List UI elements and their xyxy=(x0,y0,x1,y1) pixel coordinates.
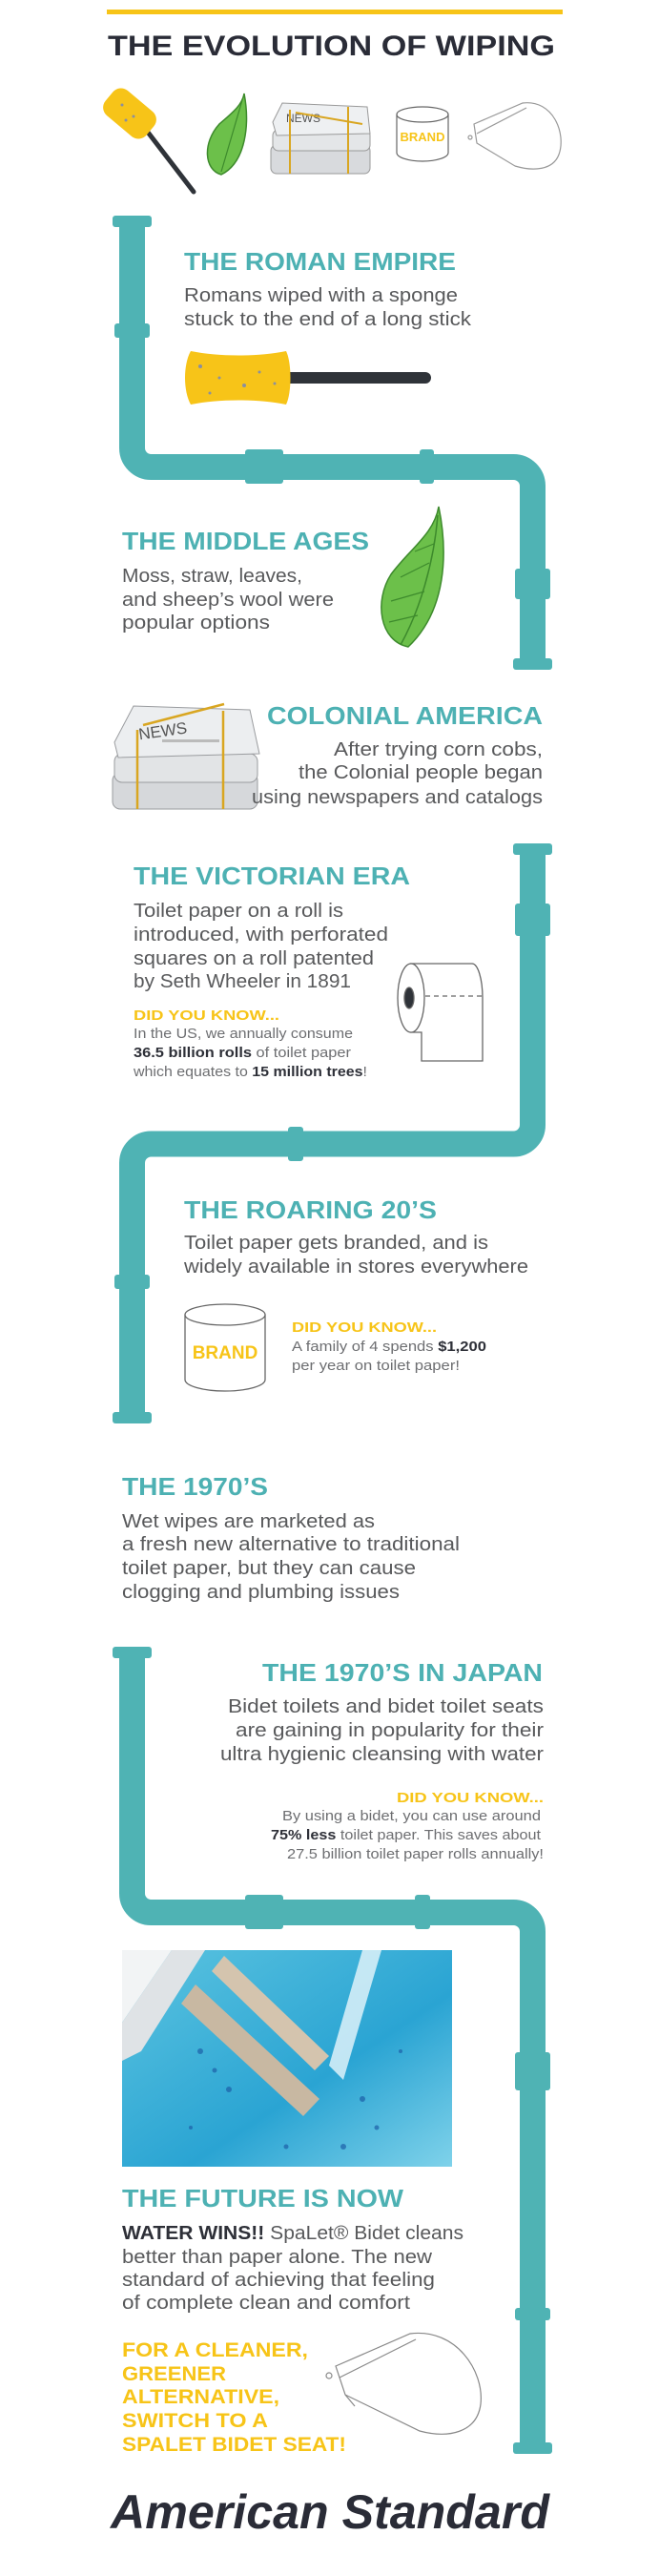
text: middle ages body: and sheep’s wool were xyxy=(122,590,334,611)
callout: victorian did you know xyxy=(133,1008,367,1080)
text: colonial body: the Colonial people began xyxy=(299,762,543,783)
text: middle ages body: popular options xyxy=(122,613,270,634)
top yellow rule xyxy=(107,10,563,14)
callout: japan did you know: 27.5 billion toilet paper rolls annually! xyxy=(287,1847,544,1862)
text: 1970s body: toilet paper, but they can cause xyxy=(122,1558,416,1579)
heading: colonial america: COLONIAL AMERICA xyxy=(267,701,543,730)
icon: sponge on stick xyxy=(99,84,194,192)
callout: victorian did you know: which equates to 15 million trees ! xyxy=(134,1065,367,1080)
callout: switch to spalet: FOR A CLEANER, xyxy=(122,2339,308,2361)
callout: roaring did you know: A family of 4 spends $1,200 xyxy=(292,1340,481,1355)
text: japan body: Bidet toilets and bidet toilet seats xyxy=(228,1696,544,1717)
callout: roaring did you know: per year on toilet paper! xyxy=(292,1359,460,1374)
icon: leaf xyxy=(381,507,443,647)
text: 1970s body: clogging and plumbing issues xyxy=(122,1582,400,1603)
pipe 1 xyxy=(113,216,552,670)
section: the future is now xyxy=(122,2184,481,2456)
callout: japan did you know: DID YOU KNOW... xyxy=(397,1790,544,1806)
text: future body: better than paper alone. The new xyxy=(122,2247,433,2268)
text: victorian body: introduced, with perforated xyxy=(134,924,388,945)
text: japan body: ultra hygienic cleansing with water xyxy=(220,1744,544,1765)
callout: roaring did you know xyxy=(292,1319,486,1374)
icon: bidet seat xyxy=(326,2333,481,2434)
text: japan body: are gaining in popularity for their xyxy=(236,1720,544,1741)
icon: brand roll xyxy=(185,1304,265,1391)
callout: victorian did you know: DID YOU KNOW... xyxy=(134,1008,279,1024)
section: 1970s in japan xyxy=(220,1658,544,1862)
text: future body: standard of achieving that feeling xyxy=(122,2270,435,2291)
icon: toilet roll xyxy=(398,964,483,1061)
heading: 1970s: THE 1970’S xyxy=(122,1472,268,1501)
text: victorian body: Toilet paper on a roll is xyxy=(134,901,343,922)
text: 1970s body: a fresh new alternative to traditional xyxy=(122,1534,460,1555)
logo: american standard: American Standard xyxy=(109,2485,550,2539)
text: 1970s body: Wet wipes are marketed as xyxy=(122,1511,375,1532)
callout: switch to spalet: ALTERNATIVE, xyxy=(122,2386,279,2408)
icon: branded roll xyxy=(397,107,448,161)
text: roman body: Romans wiped with a sponge xyxy=(184,285,458,306)
icon: brand roll: BRAND xyxy=(193,1343,257,1363)
heading: japan: THE 1970’S IN JAPAN xyxy=(262,1658,543,1687)
callout: japan did you know: By using a bidet, you can use around xyxy=(282,1809,541,1824)
photo: bidet wand spraying water xyxy=(122,1950,452,2167)
title: THE EVOLUTION OF WIPING xyxy=(108,31,555,62)
text: middle ages body: Moss, straw, leaves, xyxy=(122,566,302,587)
callout: switch to spalet: GREENER xyxy=(122,2363,226,2385)
section: roaring 20s xyxy=(183,1195,528,1391)
text: roman body: stuck to the end of a long stick xyxy=(184,309,472,330)
heading: roman empire: THE ROMAN EMPIRE xyxy=(184,247,456,276)
heading: victorian era: THE VICTORIAN ERA xyxy=(134,862,410,890)
pipe 2 xyxy=(113,843,552,1423)
text: colonial body: using newspapers and catalogs xyxy=(252,787,543,808)
section: roman empire xyxy=(184,247,472,405)
text: roaring body: Toilet paper gets branded, and is xyxy=(184,1233,488,1254)
callout: japan did you know: 75% less toilet paper. This saves about xyxy=(271,1828,520,1843)
icon: leaf xyxy=(207,93,246,175)
icon: sponge stick xyxy=(185,351,431,405)
icon: branded roll: BRAND xyxy=(401,130,444,144)
section: the 1970s xyxy=(122,1472,460,1603)
text: colonial body: After trying corn cobs, xyxy=(334,739,543,760)
heading: future: THE FUTURE IS NOW xyxy=(122,2184,403,2212)
text: victorian body: squares on a roll patented xyxy=(134,948,374,969)
heading: middle ages: THE MIDDLE AGES xyxy=(122,527,369,555)
section: colonial america xyxy=(113,701,543,809)
callout: victorian did you know: 36.5 billion rolls of toilet paper xyxy=(134,1046,340,1061)
icon: bidet seat xyxy=(468,103,561,169)
callout: victorian did you know: In the US, we annually consume xyxy=(134,1027,353,1042)
callout: japan did you know xyxy=(271,1790,544,1862)
section: victorian era xyxy=(133,862,483,1080)
callout: switch to spalet: SWITCH TO A xyxy=(122,2410,268,2432)
icon: newspapers: NEWS xyxy=(286,112,320,125)
callout: switch to spalet: SPALET BIDET SEAT! xyxy=(122,2434,346,2456)
section: middle ages xyxy=(122,507,443,647)
text: future body: WATER WINS!! SpaLet® Bidet cleans xyxy=(122,2223,454,2244)
pipe 3 xyxy=(113,1647,552,2454)
callout: roaring did you know: DID YOU KNOW... xyxy=(292,1319,437,1336)
icon: newspapers xyxy=(271,103,370,174)
icon: newspapers: NEWS xyxy=(137,718,188,743)
icon row xyxy=(99,84,561,192)
text: roaring body: widely available in stores everywhere xyxy=(183,1257,528,1278)
heading: roaring 20s: THE ROARING 20’S xyxy=(184,1195,437,1224)
text: victorian body: by Seth Wheeler in 1891 xyxy=(134,971,351,992)
text: future body: of complete clean and comfort xyxy=(122,2293,410,2314)
icon: newspapers xyxy=(113,704,259,809)
